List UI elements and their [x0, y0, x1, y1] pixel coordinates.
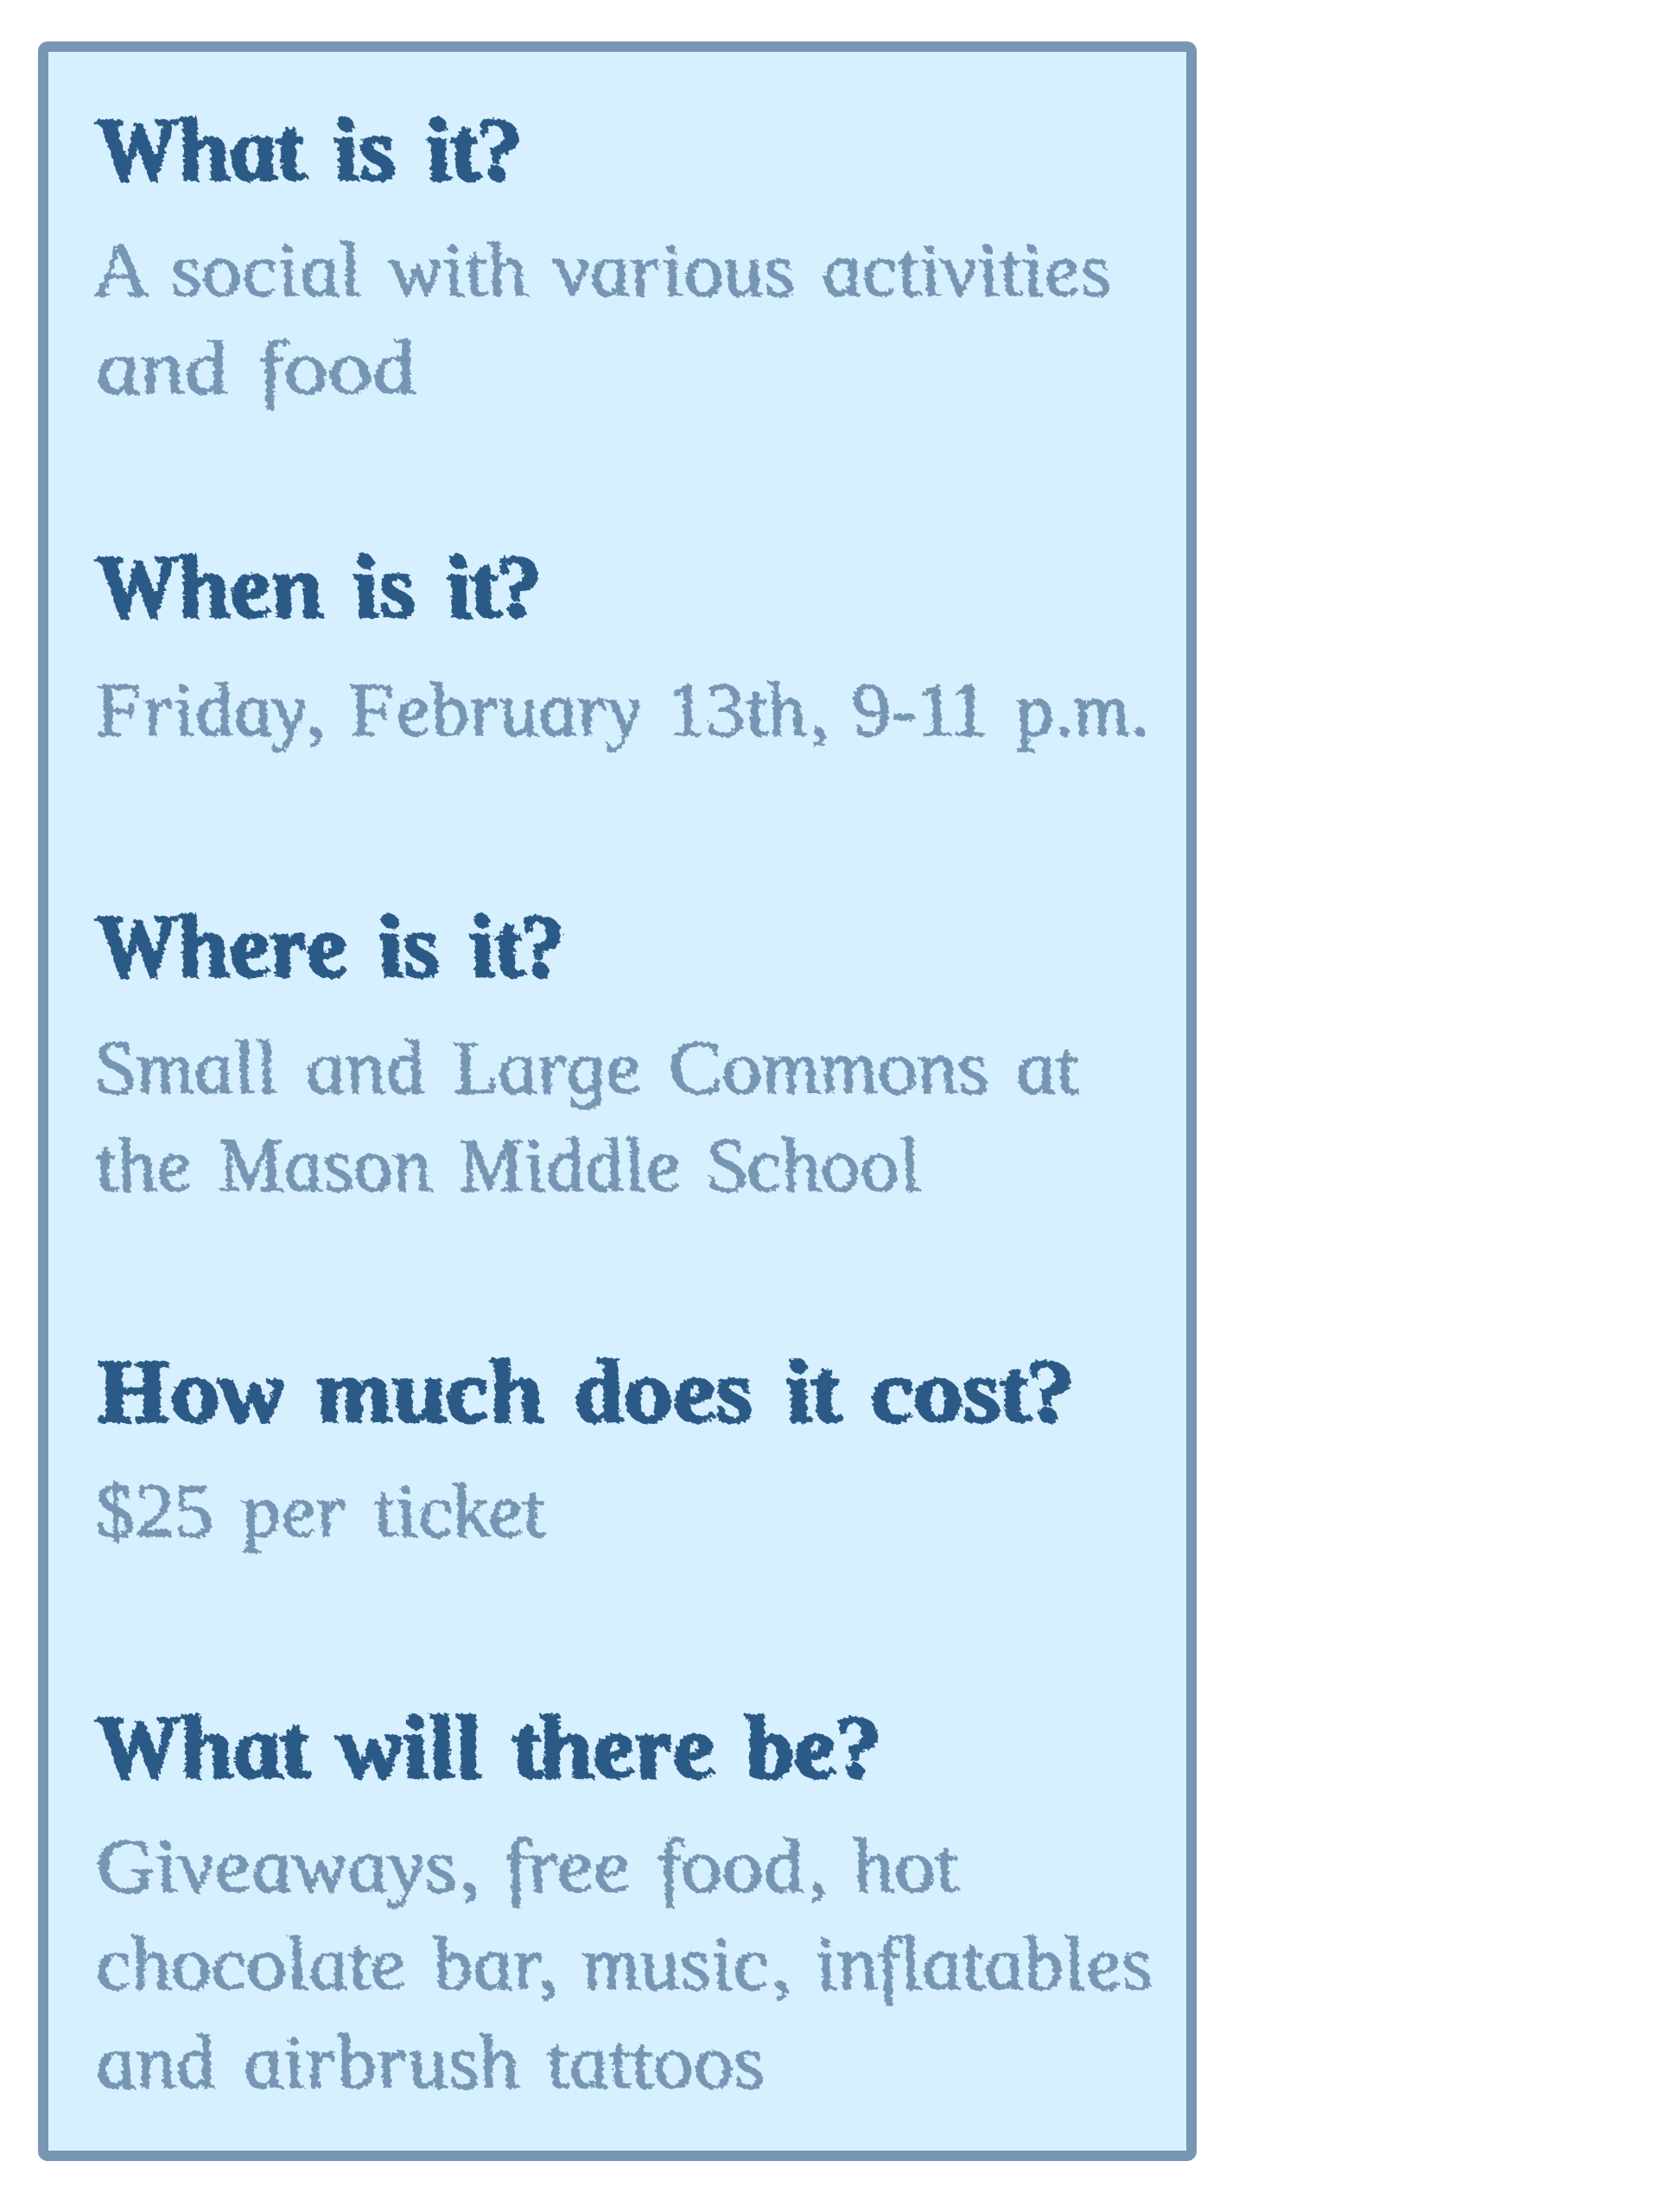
section: what will there be	[85, 1697, 1160, 2105]
section: where	[85, 896, 1087, 1208]
text: offerings description	[86, 1825, 1160, 2105]
text: what description: and food	[86, 327, 424, 410]
heading: when is it: When is it?	[85, 537, 552, 637]
text: what description	[82, 229, 1118, 410]
text: where description: the Mason Middle School	[86, 1124, 928, 1208]
heading: where is it: Where is it?	[85, 896, 575, 996]
section: what	[82, 99, 1118, 410]
section: when	[85, 537, 1156, 753]
text: what description: A social with various activities	[82, 229, 1118, 313]
text: when description: Friday, February 13th, 9-11 p.m.	[86, 669, 1156, 753]
panel: event details	[43, 47, 1191, 2156]
text: offerings description: Giveaways, free food, hot	[86, 1825, 967, 1909]
text: offerings description: chocolate bar, music, inflatables	[86, 1923, 1160, 2006]
text: where description: Small and Large Commons at	[86, 1027, 1087, 1110]
section: cost	[84, 1341, 1084, 1554]
heading: what is it: What is it?	[85, 99, 532, 200]
text: cost description: $25 per ticket	[86, 1470, 554, 1554]
heading: what will there be: What will there be?	[85, 1697, 892, 1797]
text: where description	[86, 1027, 1087, 1208]
heading: how much does it cost: How much does it cost?	[84, 1341, 1084, 1441]
text: offerings description: and airbrush tattoos	[86, 2021, 772, 2105]
